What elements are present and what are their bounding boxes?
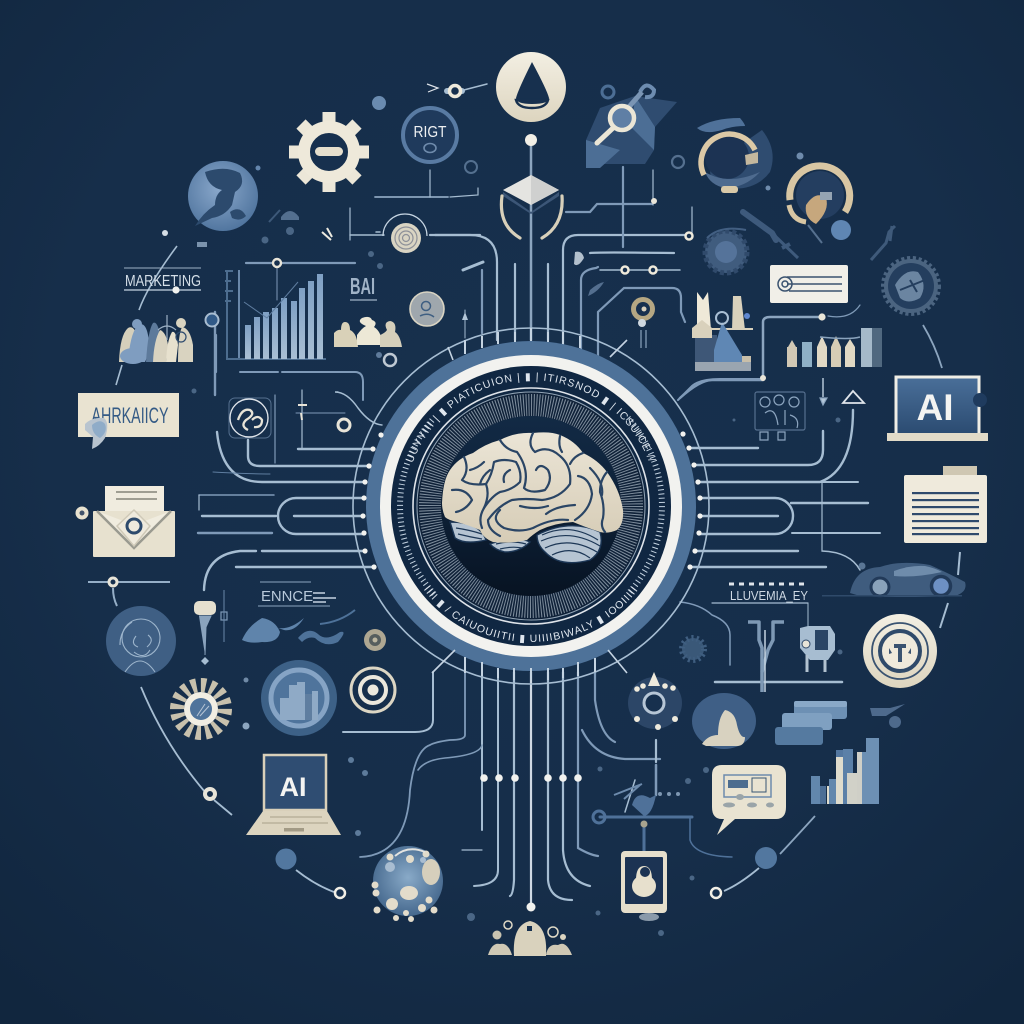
cerebellum [450,522,601,563]
outer thin ring [353,328,709,684]
icon: circular target bulb [631,297,655,348]
icon: speech bubble chart [712,765,786,835]
arc with node: bottom right [711,816,815,898]
icon: crystal ball [697,118,773,193]
icon: team busts [334,317,402,347]
icon: wrench tools [743,212,798,258]
icon: portrait oval [692,693,756,749]
icon: padlock tablet [621,835,667,921]
icon: top right junction dots [651,198,826,381]
icon: globe [188,161,258,231]
brain folds [452,433,607,536]
icon: connector node [427,84,460,96]
bar chart: left top [225,259,326,360]
circuit lines: left side [198,312,382,590]
text: right circuit label: LLUVEMIA_EY [730,588,808,603]
central brain medallion [352,327,710,685]
icon: marketing people [119,315,193,364]
icon: avatar circle [106,606,176,676]
circuit diagram right [755,378,864,440]
icon: cream target badge [863,614,937,688]
scattered small dots [192,388,842,936]
icon: dark cog wheel [884,259,938,313]
icon: gear-badge RIGT [403,108,457,162]
icon: open envelope [76,486,175,557]
icon: fingerprint ball [322,214,427,253]
icon: bar donut [261,660,337,736]
arc with ring node: lower left [141,687,232,815]
icon: dim bell [269,210,299,222]
icon: mechanical key [800,626,835,672]
icon: people group bottom [488,921,572,956]
icon: blue whale waves [242,610,355,644]
node dots on bottom lines [480,774,582,912]
icon: small ring [672,156,684,168]
icon: small gear eye [376,352,396,366]
ring text top: UUYYIII | ▮ PIATICUION | ▮ | ITIRSNOD ▮ | ICSUICE // [406,372,656,462]
ticks crossing outer ring [432,328,627,680]
icon: magnifier on polygons [586,85,677,168]
icon: portrait coin [410,292,444,326]
icon: cream sunburst [177,685,225,733]
cerebrum [442,432,623,543]
ring node: left [206,314,218,326]
icon: node sphere [372,846,443,922]
blue ring [366,341,696,671]
label: BAI [350,273,377,300]
document stack icon [904,466,987,543]
icon: small tan coin [364,629,386,651]
brain [442,432,623,563]
arc: left upper [139,246,177,310]
circuit lines: top [216,84,860,400]
icon: laptop AI right [887,377,988,441]
icon: gear-badge RIGT: RIGT [414,124,447,141]
line: people down [116,365,122,385]
icon: small pliers bottom right [870,704,905,728]
bar group: bottles [787,328,882,367]
icon: dim cog [705,229,747,273]
icon: small ring node [298,405,350,431]
icon: gear with figure [789,166,851,243]
icon: laptop AI bottom: AI [280,772,306,802]
icon: dark orb [628,672,682,730]
icon: laptop AI bottom [246,755,341,835]
icon: bulb plug [194,590,227,665]
icon: factory blocks [692,292,753,371]
icon: wiring forks [748,622,784,692]
ring white dots left [360,431,703,570]
hatch ring [430,405,632,607]
icon: pliers [871,226,895,260]
icon: blue figure on rail [593,784,680,828]
circuit lines: bottom [343,672,732,908]
text: ENNCE label: ENNCE [261,588,313,605]
icon: node with arc bottom left [276,848,345,898]
small dots above marketing [162,230,207,247]
text: ENNCE label [258,582,336,606]
label: marketing: MARKETING [125,273,201,290]
icon: dim sunburst [682,638,704,660]
circuit lines: right side [680,380,880,682]
icon: water drop badge [496,52,566,122]
label card: agency: AHRKAIICY [92,403,169,428]
marker: left arrow [462,312,468,320]
label card: agency [78,393,179,449]
arc: right edge [940,552,960,628]
document card [770,265,848,303]
arc: top right edge [923,325,942,368]
icon: small leaf shapes [574,252,604,296]
icon: scattered dots top right [766,152,804,190]
inner core [441,416,621,596]
icon: gear cream [289,112,369,192]
icon: graduation cap node [501,134,562,238]
bar chart: bottom right [811,738,879,804]
connector with ring node: left [88,578,170,606]
small top-left dots and rings [256,96,477,269]
icon: sports car [822,562,966,597]
icon: layered blocks [775,701,847,745]
icon: laptop AI right: AI [916,387,954,428]
label: marketing [124,268,201,294]
icon: concentric target [351,668,395,712]
label: BAI: BAI [350,273,375,299]
ring text bottom: IIII ▮ / CAIUOUIITII ▮ UIIIIBIWALY ▮ IOOIIIII [424,586,638,644]
ring scale ticks [400,418,662,594]
icon: swirl circuit emblem [229,398,271,438]
icons: connector nodes top right [622,232,692,274]
